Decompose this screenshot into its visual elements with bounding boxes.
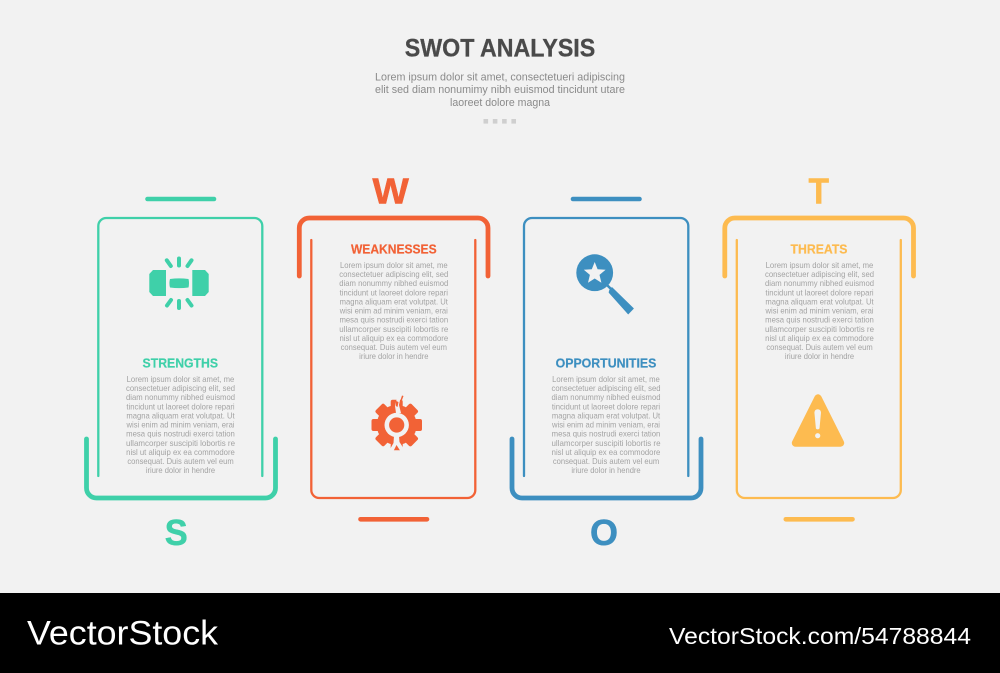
title: SWOT ANALYSIS xyxy=(405,35,595,63)
body text: magna aliquam erat volutpat. Ut xyxy=(126,410,235,420)
body text: iriure dolor in hendre xyxy=(146,465,215,475)
body text: wisi enim ad minim veniam, erai xyxy=(126,420,235,430)
letter S: S xyxy=(165,512,188,553)
top bracket xyxy=(725,218,914,276)
body text: mesa quis nostrudi exerci tation xyxy=(126,429,235,439)
body text: tincidunt ut laoreet dolore repari xyxy=(126,401,235,411)
letter W: W xyxy=(372,170,409,211)
body text: consequat. Duis autem vel eum xyxy=(127,456,234,466)
body text: consectetuer adipiscing elit, sed xyxy=(552,383,661,393)
heading: weaknesses: WEAKNESSES xyxy=(351,241,437,256)
subtitle text block: elit sed diam nonumimy nibh euismod tincidunt utare xyxy=(375,84,625,96)
body text: ullamcorper suscipiti lobortis re xyxy=(126,438,235,448)
body text: consequat. Duis autem vel eum xyxy=(553,456,659,466)
body text: mesa quis nostrudi exerci tation xyxy=(552,429,661,439)
body text: ullamcorper suscipiti lobortis re xyxy=(552,438,661,448)
footer url text: VectorStock.com/54788844 xyxy=(669,623,971,649)
body text: Lorem ipsum dolor sit amet, me xyxy=(766,260,874,270)
body text: Lorem ipsum dolor sit amet, me xyxy=(340,260,448,270)
letter T: T xyxy=(809,170,829,211)
heading: opportunities: OPPORTUNITIES xyxy=(556,355,657,370)
body text: consequat. Duis autem vel eum xyxy=(766,342,873,352)
body text: iriure dolor in hendre xyxy=(359,351,429,361)
panel: weaknesses xyxy=(299,170,488,519)
panel: opportunities xyxy=(512,199,701,553)
icon: warning triangle xyxy=(796,398,840,443)
icon: magnifier with star xyxy=(576,254,634,314)
body text: diam nonummy nibhed euismod xyxy=(552,392,661,402)
card outline xyxy=(737,240,901,498)
body text xyxy=(126,374,235,475)
body text: wisi enim ad minim veniam, erai xyxy=(339,306,448,316)
top bar xyxy=(573,197,640,201)
footer band xyxy=(0,593,1000,673)
body text: wisi enim ad minim veniam, erai xyxy=(765,306,874,316)
bottom bar xyxy=(360,517,427,522)
bottom bracket xyxy=(512,439,701,498)
body text xyxy=(339,260,449,361)
body text: iriure dolor in hendre xyxy=(571,465,641,475)
footer logo text: VectorStock xyxy=(27,614,219,652)
card outline xyxy=(311,240,475,498)
body text: ullamcorper suscipiti lobortis re xyxy=(765,324,874,334)
subtitle text block: Lorem ipsum dolor sit amet, consectetueri adipiscing xyxy=(375,72,625,84)
body text: consectetuer adipiscing elit, sed xyxy=(765,269,874,279)
body text: consectetuer adipiscing elit, sed xyxy=(126,383,235,393)
bottom bracket xyxy=(86,439,276,498)
body text xyxy=(551,374,661,475)
top bar xyxy=(148,197,214,201)
body text: consequat. Duis autem vel eum xyxy=(341,342,447,352)
body text: magna aliquam erat volutpat. Ut xyxy=(340,296,449,306)
body text: tincidunt ut laoreet dolore repari xyxy=(552,401,660,411)
body text: tincidunt ut laoreet dolore repari xyxy=(765,287,874,297)
heading: threats: THREATS xyxy=(790,241,848,256)
body text: diam nonummy nibhed euismod xyxy=(339,278,449,288)
body text: iriure dolor in hendre xyxy=(785,351,854,361)
body text: nisl ut aliquip ex ea commodore xyxy=(339,333,448,343)
body text: magna aliquam erat volutpat. Ut xyxy=(765,296,874,306)
body text: nisl ut aliquip ex ea commodore xyxy=(126,447,235,457)
body text: nisl ut aliquip ex ea commodore xyxy=(552,447,661,457)
body text: Lorem ipsum dolor sit amet, me xyxy=(552,374,660,384)
body text: magna aliquam erat volutpat. Ut xyxy=(552,410,661,420)
body text: diam nonummy nibhed euismod xyxy=(765,278,874,288)
subtitle text block: laoreet dolore magna xyxy=(450,97,551,109)
decorative dots xyxy=(484,119,516,124)
card outline xyxy=(524,218,688,476)
icon: broken dumbbell xyxy=(149,258,209,308)
body text: nisl ut aliquip ex ea commodore xyxy=(765,333,874,343)
body text: ullamcorper suscipiti lobortis re xyxy=(339,324,449,334)
icon: cracked gear xyxy=(372,396,422,452)
body text: Lorem ipsum dolor sit amet, me xyxy=(127,374,235,384)
top bracket xyxy=(299,218,488,276)
body text: mesa quis nostrudi exerci tation xyxy=(339,315,448,325)
body text xyxy=(765,260,874,361)
body text: diam nonummy nibhed euismod xyxy=(126,392,235,402)
body text: tincidunt ut laoreet dolore repari xyxy=(340,287,448,297)
body text: wisi enim ad minim veniam, erai xyxy=(551,420,660,430)
letter O: O xyxy=(590,512,618,553)
body text: mesa quis nostrudi exerci tation xyxy=(765,315,874,325)
body text: consectetuer adipiscing elit, sed xyxy=(339,269,449,279)
panel: strengths xyxy=(86,199,276,553)
card outline xyxy=(98,218,262,476)
heading: strengths: STRENGTHS xyxy=(143,355,218,370)
bottom bar xyxy=(786,517,852,522)
panel: threats xyxy=(725,170,914,519)
subtitle text block xyxy=(375,72,625,109)
